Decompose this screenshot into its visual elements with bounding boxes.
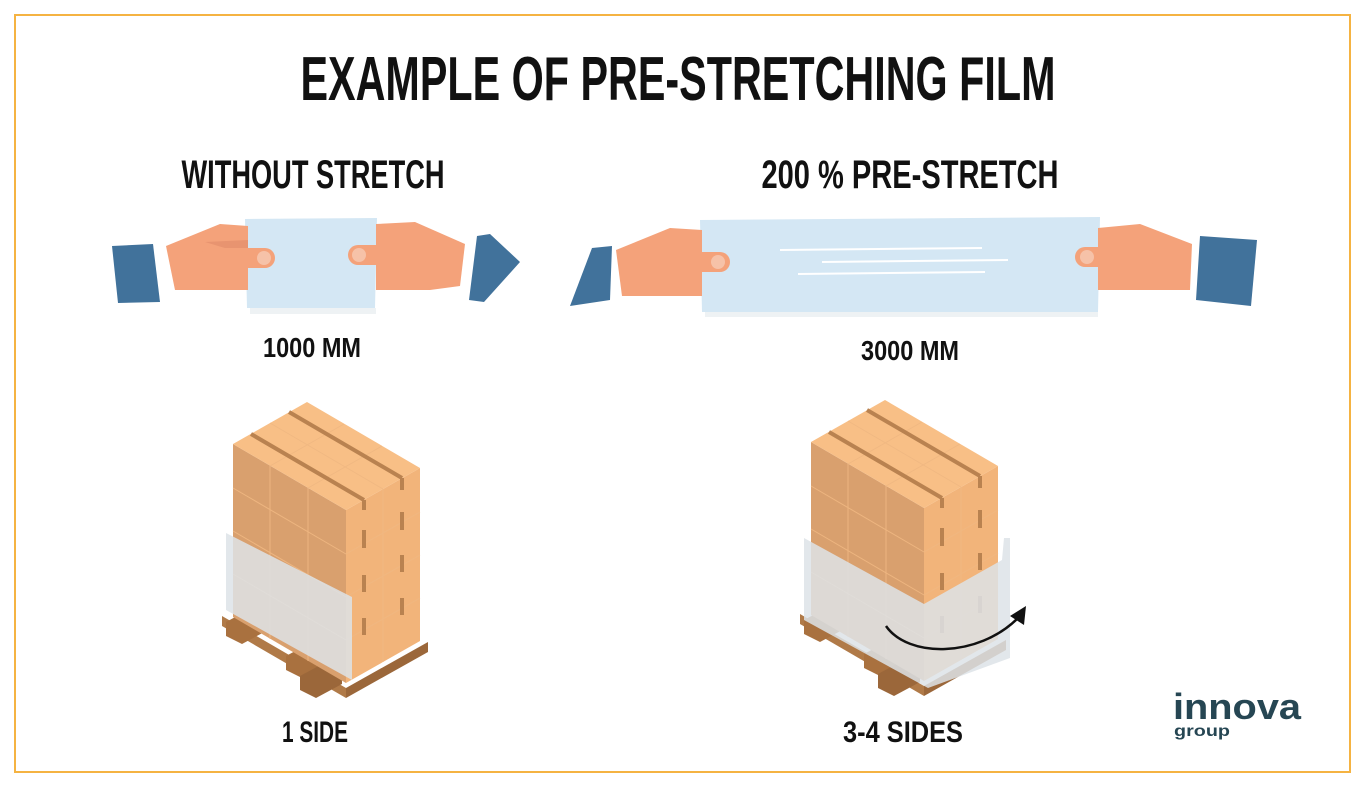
film: one side: [226, 533, 352, 680]
label: 1 side: 1 SIDE: [282, 716, 348, 749]
pallet: 3-4 sides wrapped with arrow: [800, 400, 1026, 696]
heading: without stretch: WITHOUT STRETCH: [182, 153, 444, 197]
film: multiple sides: [804, 538, 1010, 688]
heading: 200% pre-stretch: 200 % PRE-STRETCH: [762, 153, 1058, 197]
label: 3-4 sides: 3-4 SIDES: [843, 716, 963, 749]
logo: [1173, 686, 1302, 740]
label: 1000 mm: 1000 MM: [263, 332, 361, 363]
pallet: one side wrapped: [222, 402, 428, 698]
logo: group: [1174, 723, 1230, 740]
arrow: [886, 618, 1018, 649]
illustration: hands 200% stretch: [570, 217, 1257, 317]
label: 3000 mm: 3000 MM: [861, 335, 959, 366]
illustration: hands without stretch: [112, 218, 520, 314]
logo: innova: [1173, 686, 1302, 727]
